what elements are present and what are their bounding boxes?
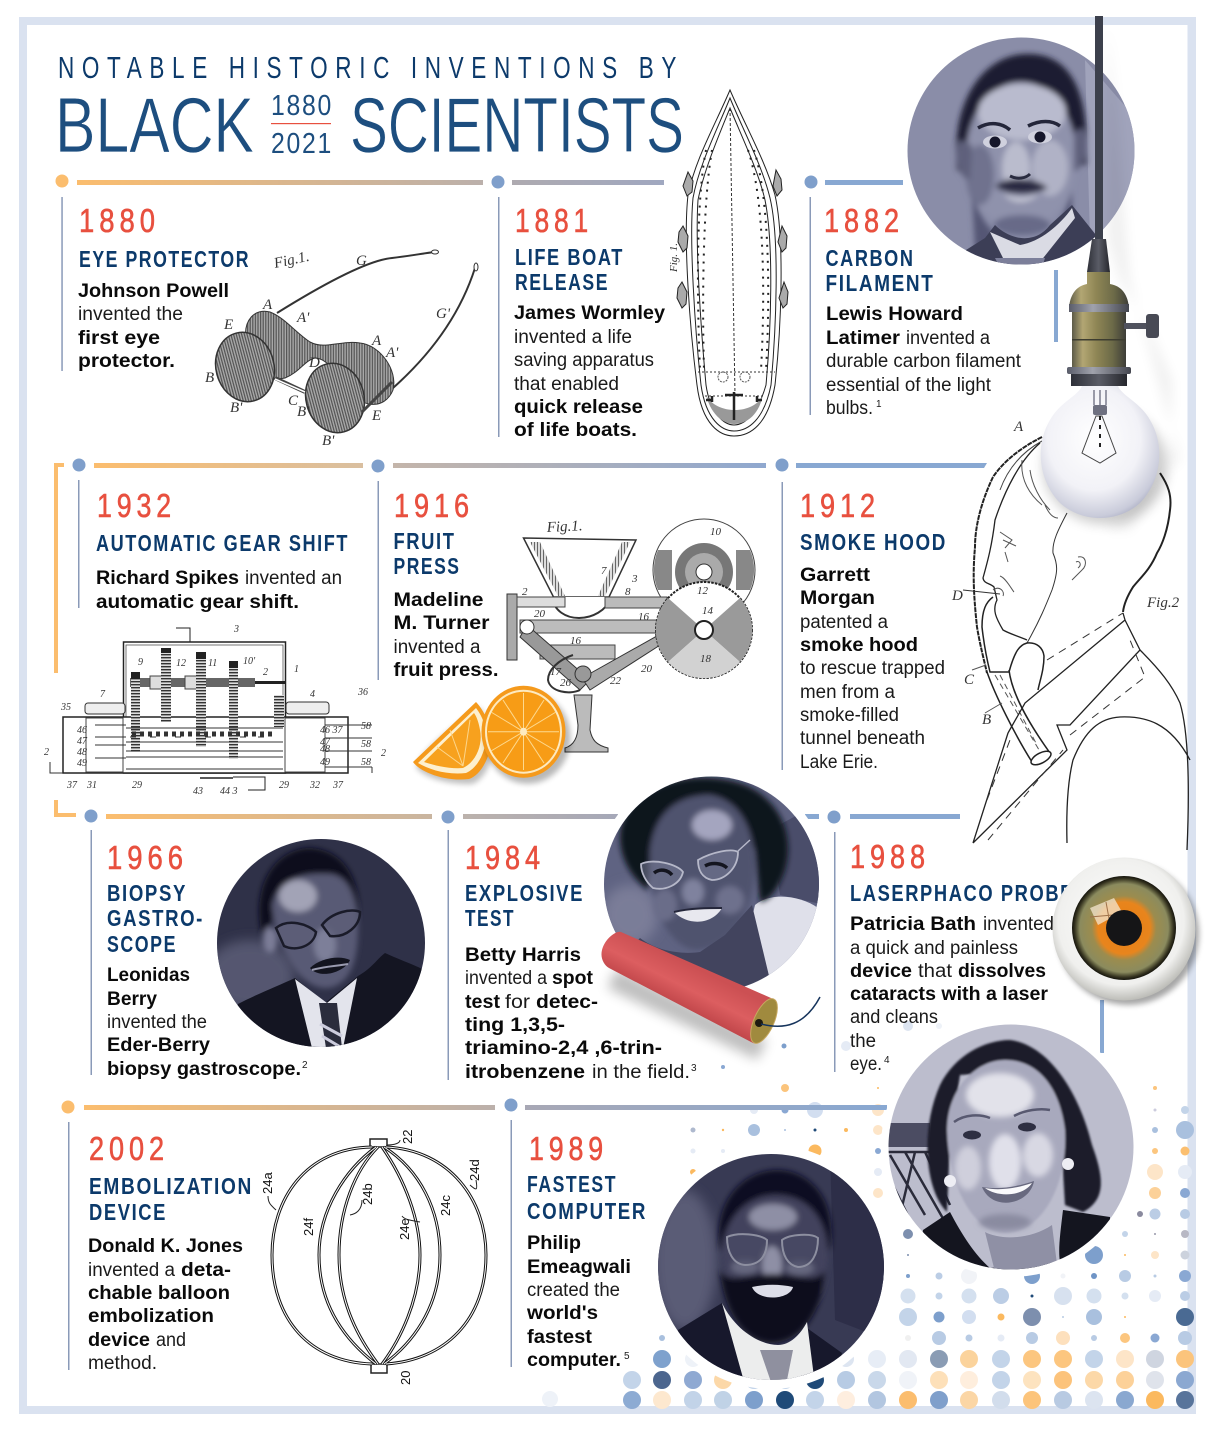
body text [826, 304, 1022, 419]
patent drawing: eye protector: E [371, 408, 381, 424]
icon: orange slices [413, 686, 570, 784]
body text: invented a life [514, 327, 632, 348]
body text [394, 590, 498, 681]
heading: EXPLOSIVE [465, 880, 584, 906]
body text: 4 [884, 1055, 890, 1066]
portrait: Lewis Howard Latimer [908, 38, 1134, 264]
glass bulb [1041, 386, 1167, 524]
patent drawing: gear shift: 2 [44, 747, 49, 758]
patent drawing: gear shift: 9 [138, 657, 143, 668]
section: 1881 life boat release [514, 202, 665, 441]
timeline row 2 [54, 458, 987, 770]
patent drawing: fruit press: 16 [570, 635, 582, 647]
patent drawing: smoke hood: A [1013, 419, 1024, 435]
body text: and cleans [850, 1007, 938, 1028]
body text: invented a [465, 968, 547, 989]
heading: LIFE BOAT [515, 244, 624, 270]
heading: BIOPSY [107, 880, 187, 906]
patent drawing: gear shift: 47 [77, 736, 88, 747]
body text [514, 303, 665, 441]
patent drawing: balloon: 24e [397, 1218, 412, 1240]
body text: eye. [850, 1054, 882, 1075]
patent drawing: eye protector: B' [230, 400, 243, 416]
patent drawing: eye protector: Fig.1. [272, 249, 311, 272]
patent drawing: fruit press: 7 [601, 565, 607, 577]
heading: FASTEST [527, 1171, 617, 1197]
body text: M. Turner [394, 613, 490, 634]
body text: spot [552, 968, 594, 989]
patent drawing: eye protector: G [356, 253, 367, 269]
patent drawing: eye protector: G' [436, 306, 451, 322]
section: 1989 fastest computer [526, 1130, 647, 1371]
body text: ting 1,3,5- [465, 1015, 565, 1036]
body text: cataracts with a laser [850, 984, 1049, 1005]
patent drawing: eye protector: B' [297, 404, 310, 420]
bulb cord [1095, 16, 1103, 240]
body text: deta- [181, 1260, 231, 1281]
heading [465, 880, 584, 931]
section: 1966 biopsy gastroscope [107, 839, 308, 1080]
body text: invented a [394, 637, 481, 658]
heading [826, 245, 934, 296]
body text: Latimer [826, 328, 901, 349]
heading: PRESS [394, 553, 460, 579]
heading [527, 1171, 647, 1224]
body text [107, 965, 308, 1080]
body text: in the field. [592, 1062, 690, 1083]
section: 1882 carbon filament [824, 202, 1022, 419]
patent drawing: gear shift: 37 [332, 780, 344, 791]
patent drawing: balloon: 24c [438, 1195, 453, 1216]
icon: hanging light bulb [1041, 16, 1180, 530]
body text: of life boats. [514, 420, 637, 441]
year: 1881 [515, 202, 593, 239]
body text: computer. [527, 1350, 621, 1371]
heading: SCOPE [107, 931, 177, 957]
heading: FILAMENT [826, 270, 934, 296]
body text: Madeline [394, 590, 484, 611]
patent drawing: gear shift: 44 3 [220, 786, 238, 797]
body text: fruit press. [394, 660, 498, 681]
patent drawing: gear shift: 2 [381, 748, 386, 759]
heading: LASERPHACO PROBE [850, 880, 1074, 906]
body text: invented a [88, 1260, 175, 1281]
body text: 5 [624, 1351, 630, 1362]
body text: invented the [107, 1012, 207, 1033]
body text: world's [526, 1303, 598, 1324]
body text: quick release [514, 397, 643, 418]
body text: that [918, 961, 953, 982]
patent drawing: fruit press: 18 [700, 653, 712, 665]
year: 1988 [850, 838, 930, 875]
patent drawing: fruit press: 12 [697, 585, 708, 597]
patent drawing: gear shift [44, 624, 386, 797]
portrait: Patricia Bath [881, 1017, 1141, 1280]
background dot field [542, 1021, 1194, 1409]
body text: invented a [906, 328, 990, 349]
body text: Richard Spikes [96, 568, 239, 589]
patent drawing: fruit press: 14 [702, 605, 714, 617]
heading: GASTRO- [107, 905, 204, 931]
timeline row 1 [56, 174, 1058, 437]
body text: test [465, 992, 501, 1013]
section: 1988 laserphaco probe [850, 838, 1074, 1075]
brass socket [1067, 272, 1159, 386]
body text: Donald K. Jones [88, 1236, 243, 1257]
body text [800, 565, 945, 773]
title word: scientists: SCIENTISTS [350, 81, 684, 169]
patent drawing: gear shift: 32 [309, 780, 320, 791]
body text: Leonidas [107, 965, 190, 986]
patent drawing: fruit press: 10 [710, 526, 722, 538]
patent drawing: boat: Fig. 1. [668, 243, 680, 273]
body text: Eder-Berry [107, 1035, 210, 1056]
heading: SMOKE HOOD [800, 529, 947, 555]
year: 1989 [529, 1130, 608, 1167]
body text: automatic gear shift. [96, 592, 299, 613]
patent drawing: gear shift: 29 [279, 780, 289, 791]
heading: CARBON [826, 245, 914, 271]
patent drawing: gear shift: 43 [193, 786, 203, 797]
portrait: Betty Harris [604, 776, 819, 986]
body text [88, 1236, 243, 1374]
icon: glass eye [1052, 858, 1199, 1005]
patent drawing: eye protector: A [371, 333, 382, 349]
heading [394, 528, 460, 579]
body text: first eye [78, 328, 160, 349]
timeline row 4 [62, 1098, 887, 1370]
portrait: Leonidas Berry [217, 839, 425, 1047]
patent drawing: fruit press: 3 [631, 573, 638, 585]
body text: device [850, 961, 912, 982]
patent drawing: gear shift: 29 [132, 780, 142, 791]
body text: the [850, 1031, 876, 1052]
patent drawing: boat [668, 90, 788, 436]
patent drawing: gear shift: 58 [361, 757, 371, 768]
body text: biopsy gastroscope. [107, 1059, 301, 1080]
patent drawing: balloon: 20 [398, 1371, 413, 1385]
body text: device [88, 1330, 150, 1351]
patent drawing: smoke hood: Fig.2 [1146, 595, 1180, 611]
heading: RELEASE [515, 269, 609, 295]
body text: patented a [800, 612, 888, 633]
patent drawing: smoke hood: D [951, 588, 963, 604]
socket cap [1087, 239, 1110, 272]
body text [526, 1233, 631, 1371]
body text [850, 914, 1054, 1075]
patent drawing: eye protector: B' [322, 433, 335, 449]
body text: protector. [78, 351, 175, 372]
patent drawing: fruit press: 2 [522, 586, 528, 598]
patent drawing: eye protector: E [223, 317, 233, 333]
body text: fastest [527, 1327, 593, 1348]
patent drawing: fruit press: 26 [560, 677, 572, 689]
title date range: 2021 [271, 128, 333, 160]
patent drawing: eye protector [205, 249, 478, 449]
body text: created the [527, 1280, 620, 1301]
section: 1984 explosive test [465, 839, 697, 1083]
body text: Patricia Bath [850, 914, 976, 935]
body text: Emeagwali [527, 1257, 631, 1278]
patent drawing: eye protector: A [262, 297, 273, 313]
body text: triamino-2,4 ,6-trin- [465, 1038, 662, 1059]
patent drawing: eye protector: A' [296, 310, 310, 326]
body text: and [156, 1330, 186, 1351]
body text: Garrett [800, 565, 871, 586]
patent drawing: eye protector: A' [385, 345, 399, 361]
body text: 2 [302, 1060, 308, 1071]
patent drawing: eye protector: B [205, 370, 214, 386]
body text: James Wormley [514, 303, 665, 324]
title [55, 50, 684, 169]
body text: Morgan [800, 588, 875, 609]
heading: EMBOLIZATION [89, 1173, 253, 1199]
patent drawing: gear shift: 7 [100, 689, 106, 700]
body text: invented the [78, 304, 183, 325]
body text: saving apparatus [514, 350, 654, 371]
patent drawing: gear shift: 58 [361, 721, 371, 732]
patent drawing: gear shift: 49 [320, 757, 330, 768]
body text: Johnson Powell [78, 281, 229, 302]
patent drawing: gear shift: 31 [86, 780, 97, 791]
title word: black: BLACK [55, 81, 254, 169]
year: 1984 [465, 839, 545, 876]
patent drawing: gear shift: 11 [208, 658, 217, 669]
section: 1932 automatic gear shift [96, 487, 349, 613]
body text: Berry [107, 989, 157, 1010]
title line one: NOTABLE HISTORIC INVENTIONS BY [58, 50, 684, 85]
body text: essential of the light [826, 375, 992, 396]
body text: 1 [876, 399, 882, 410]
body text: chable balloon [88, 1283, 230, 1304]
section: 1880 eye protector [78, 202, 250, 372]
patent drawing: fruit press [507, 518, 755, 752]
body text: Philip [527, 1233, 581, 1254]
body text: to rescue trapped [800, 658, 945, 679]
body text: method. [88, 1353, 157, 1374]
timeline row 3 [54, 800, 1104, 1080]
patent drawing: gear shift: 49 [77, 758, 87, 769]
section: 1912 smoke hood [800, 487, 947, 773]
patent drawing: gear shift: 10' [243, 656, 256, 667]
body text: tunnel beneath [800, 728, 925, 749]
year: 2002 [89, 1130, 169, 1167]
body text: itrobenzene [465, 1062, 585, 1083]
body text: smoke hood [800, 635, 918, 656]
heading [515, 244, 624, 295]
body text [78, 281, 229, 372]
patent drawing: gear shift: 58 [361, 739, 371, 750]
body text: durable carbon filament [826, 351, 1022, 372]
patent drawing: fruit press: 22 [610, 675, 622, 687]
patent drawing: fruit press: 8 [625, 586, 631, 598]
patent drawing: gear shift: 12 [176, 658, 186, 669]
patent drawing: gear shift: 36 [357, 687, 368, 698]
patent drawing: smoke hood: C [964, 672, 975, 688]
patent drawing: gear shift: 4 [310, 689, 315, 700]
patent drawing: fruit press: 20 [641, 663, 652, 675]
patent drawing: gear shift: 47 [320, 737, 331, 748]
heading: DEVICE [89, 1199, 167, 1225]
heading: EYE PROTECTOR [79, 246, 250, 272]
patent drawing: gear shift: 3 [233, 624, 239, 635]
body text: men from a [800, 682, 895, 703]
body text: that enabled [514, 374, 619, 395]
body text: bulbs. [826, 398, 873, 419]
year: 1916 [394, 487, 474, 524]
patent drawing: fruit press: 16 [638, 611, 650, 623]
patent drawing: balloon: 24b [360, 1183, 375, 1205]
year: 1966 [107, 839, 188, 876]
body text: Lewis Howard [826, 304, 963, 325]
year: 1880 [79, 202, 160, 239]
body text: a quick and painless [850, 938, 1018, 959]
icon: dynamite [601, 932, 820, 1050]
heading [89, 1173, 253, 1225]
body text: embolization [88, 1306, 214, 1327]
body text: 3 [691, 1063, 697, 1074]
patent drawing: gear shift: 46 [77, 725, 87, 736]
heading: COMPUTER [527, 1198, 647, 1224]
body text: detec- [536, 992, 598, 1013]
year: 1912 [800, 487, 880, 524]
heading [107, 880, 204, 957]
patent drawing: balloon: 24d [467, 1159, 482, 1181]
heading: TEST [465, 905, 515, 931]
portrait: Philip Emeagwali [649, 1145, 893, 1389]
body text: dissolves [958, 961, 1046, 982]
patent drawing: balloon: 24f [301, 1218, 316, 1236]
body text: Betty Harris [465, 945, 581, 966]
patent drawing: eye protector: D [308, 355, 320, 371]
body text: Lake Erie. [800, 752, 878, 773]
body text: invented [983, 914, 1054, 935]
patent drawing: gear shift: 37 [66, 780, 78, 791]
patent drawing: fruit press: 17 [550, 666, 562, 678]
heading: FRUIT [394, 528, 456, 554]
body text: for [505, 992, 531, 1013]
patent drawing: smoke hood: B [982, 712, 991, 728]
title date range [271, 90, 333, 160]
patent drawing: gear shift: 2 [263, 667, 268, 678]
body text: invented an [245, 568, 342, 589]
patent drawing: gear shift: 48 [77, 747, 87, 758]
section: 1916 fruit press [394, 487, 498, 681]
patent drawing: fruit press: Fig.1. [545, 518, 583, 536]
body text: smoke-filled [800, 705, 899, 726]
patent drawing: gear shift: 48 [320, 744, 330, 755]
body text [465, 945, 697, 1083]
year: 1882 [824, 202, 904, 239]
patent drawing: eye protector: C [288, 393, 299, 409]
patent drawing: gear shift: 46 37 [320, 725, 344, 736]
title date range: 1880 [271, 90, 333, 122]
patent drawing: balloon: 22 [400, 1130, 415, 1144]
section: 2002 embolization device [88, 1130, 253, 1374]
patent drawing: balloon [260, 1130, 486, 1385]
year: 1932 [97, 487, 176, 524]
patent drawing: fruit press: 20 [534, 608, 546, 620]
body text [96, 568, 342, 613]
patent drawing: gear shift: 1 [294, 664, 299, 675]
heading: AUTOMATIC GEAR SHIFT [96, 530, 349, 556]
patent drawing: smoke hood [951, 419, 1190, 850]
patent drawing: balloon: 24a [260, 1172, 275, 1194]
patent drawing: gear shift: 35 [60, 702, 71, 713]
